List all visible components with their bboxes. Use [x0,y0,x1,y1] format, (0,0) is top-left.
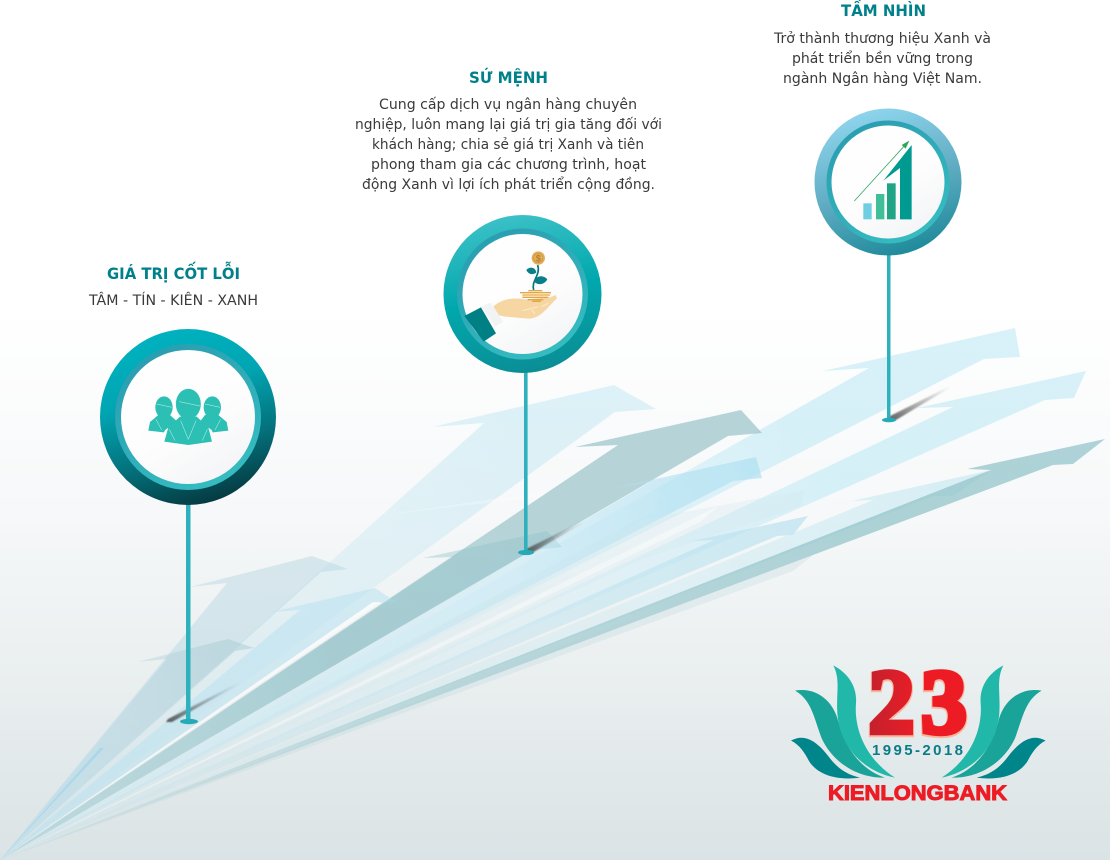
inner ring 2 [457,228,588,360]
arrow: right light blue [0,371,1086,860]
years: 1995-2018 [872,742,963,759]
arrow: small teal near second pole [0,531,562,860]
body: core values: TÂM - TÍN - KIÊN - XANH [88,291,258,309]
body: mission: khách hàng; chia sẻ giá trị Xanh và tiên [372,137,644,153]
foot 1 [180,719,198,724]
arrow: lower pale [0,470,991,860]
inner ring 3 [826,120,950,244]
arrow: pale overlay middle [0,478,660,860]
arrow: centre blue [0,457,762,860]
brand name: KIENLONGBANK [828,782,1007,805]
streak near origin [0,748,104,860]
pole 3 [887,250,890,420]
body: vision: Trở thành thương hiệu Xanh và [773,31,991,47]
arrow: left grey blue [0,556,348,860]
body: mission: Cung cấp dịch vụ ngân hàng chuyên [379,97,637,113]
pin shadow 2 [526,521,584,553]
number 23: 2 [869,652,914,752]
foot 3 [882,418,896,422]
body: mission: nghiệp, luôn mang lại giá trị gia tăng đối với [355,116,662,133]
body: vision: phát triển bền vững trong [792,50,973,67]
white stripe along fan [0,602,381,860]
pin shadow 1 [166,682,241,722]
heading: sứ mệnh: SỨ MỆNH [469,67,548,87]
lotus leaves [791,665,1046,778]
pin shadow 3 [888,386,951,420]
arrow fan rising from bottom-left [0,328,1105,860]
pin: sứ mệnh [444,215,602,555]
disc 1 [121,350,255,484]
icon: three business people [148,389,228,445]
arrow: left small grey [0,639,254,860]
pin: giá trị cốt lõi [100,329,276,724]
arrow: centre pale blue [0,385,656,860]
body: mission [355,97,662,193]
inner ring 1 [115,344,261,490]
pole 1 [186,500,190,721]
icon: growth bar chart [854,141,912,219]
ring 2 [444,215,602,373]
foot 2 [518,550,534,555]
arrow: upper right light blue [0,328,1020,860]
icon: hand holding coins and sprout: $ [536,253,541,263]
arrow: lower centre blue [0,516,808,860]
heading: tầm nhìn: TẦM NHÌN [841,0,926,20]
pale white band in fan [0,505,720,860]
arrow: centre dark teal [0,410,762,860]
text block: tầm nhìn [773,0,991,87]
text block: giá trị cốt lõi [88,262,258,309]
arrow: pale wide [0,490,805,860]
icon: hand holding coins and sprout [464,251,557,342]
arrow: long right teal [0,439,1105,860]
number 23 [869,652,967,754]
number 23: 2 [869,652,914,754]
disc 2 [462,234,582,354]
body: vision [773,31,991,87]
ring 3 [814,108,962,256]
body: vision: ngành Ngân hàng Việt Nam. [783,71,982,87]
arrow: lower grey small [0,553,812,860]
number 23: 3 [921,652,967,752]
number 23: 3 [921,652,967,754]
pole 2 [524,368,528,552]
logo: kienlongbank 23 years [791,652,1046,805]
pin: tầm nhìn [814,108,962,422]
ring 1 [100,329,276,505]
text block: sứ mệnh [355,67,662,193]
disc 3 [832,126,944,238]
body: mission: phong tham gia các chương trình, hoạt [371,157,647,173]
body: mission: động Xanh vì lợi ích phát triển cộng đồng. [362,176,655,193]
arrow: left light blue [0,588,396,860]
heading: giá trị cốt lõi: GIÁ TRỊ CỐT LỖI [107,262,240,283]
